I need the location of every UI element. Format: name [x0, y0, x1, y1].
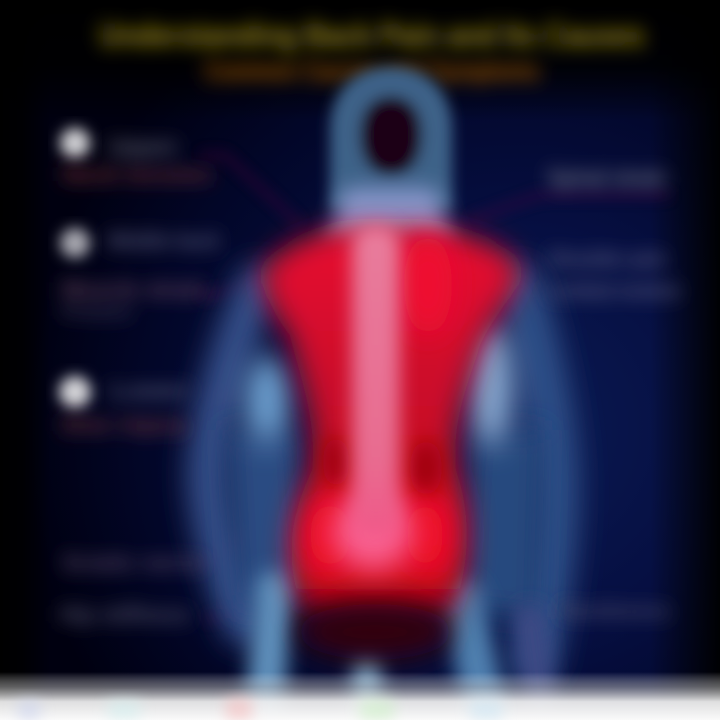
callout 2: Middle back	[108, 228, 221, 253]
figure: neck	[325, 188, 455, 245]
callout 1: Neck tension	[62, 162, 212, 187]
figure: bright upper back highlight	[404, 235, 452, 335]
figure: forearm highlights	[243, 323, 515, 447]
callout 3	[59, 376, 191, 437]
callout 4: Sciatic nerve	[62, 550, 204, 575]
figure: arms	[208, 285, 556, 660]
figure: spine	[352, 225, 400, 535]
figure: red torso	[262, 228, 520, 615]
footer strip	[0, 672, 720, 720]
callout 2	[60, 228, 221, 322]
figure: bright hip highlights	[310, 503, 443, 567]
callout 2: Posture	[62, 302, 132, 322]
figure: lower dark pelvis	[297, 604, 453, 660]
title	[100, 17, 644, 86]
callout 3: Lower	[110, 378, 191, 403]
title: Common Causes and Symptoms	[204, 55, 540, 86]
figure: pelvis glow	[333, 494, 413, 570]
callout 5: Hip stiffness	[60, 602, 190, 627]
callout 3: Disc injury	[62, 412, 188, 437]
callout 7	[548, 246, 680, 303]
callout 6: Spinal strain	[548, 165, 666, 192]
callout 7: Shoulder pain	[548, 246, 666, 271]
figure: legs	[264, 590, 540, 710]
callout 2: Muscle strain	[62, 277, 207, 302]
title: Understanding Back Pain and Its Causes	[100, 17, 644, 53]
human figure	[208, 67, 556, 710]
figure: head	[330, 67, 452, 210]
figure: blue fill beside torso	[225, 430, 545, 620]
callout 7: Limited motion	[548, 278, 680, 303]
callouts: left	[59, 128, 221, 627]
figure: waist shadows	[323, 436, 442, 496]
callout 1	[60, 128, 212, 187]
footer colour accents	[18, 698, 502, 720]
callouts: right	[548, 165, 680, 623]
callout 1: Upper	[108, 134, 178, 159]
callout 8: Numbness	[560, 598, 670, 623]
callout connector lines	[200, 155, 670, 620]
